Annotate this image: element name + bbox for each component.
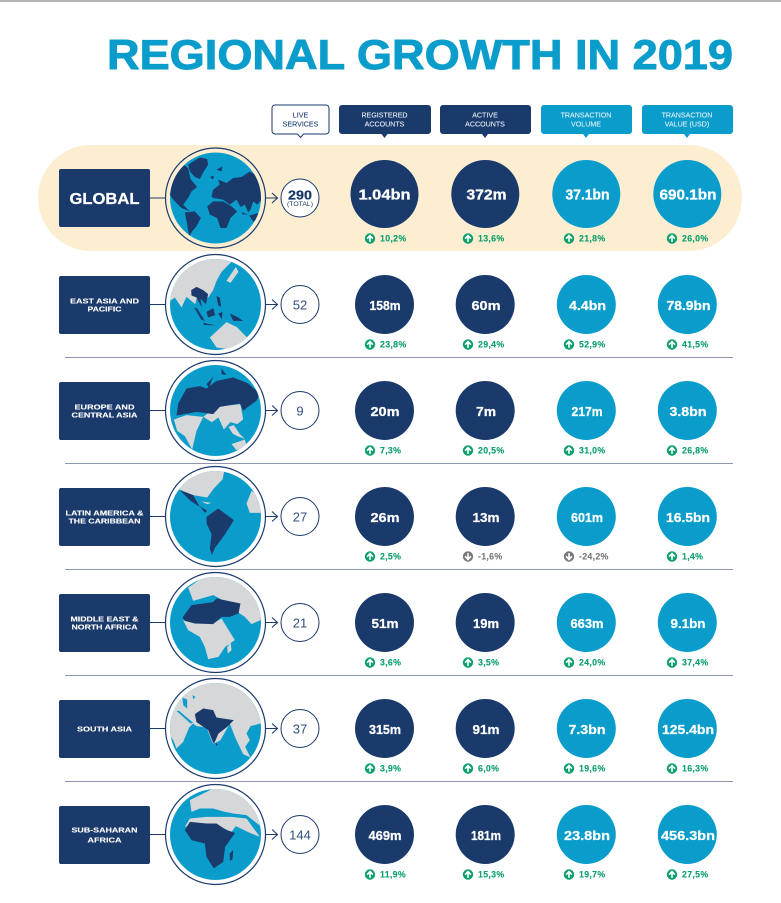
metrics: europe and central asia: 3.8bn	[670, 404, 707, 419]
metrics: europe and central asia: 26,8%	[682, 446, 708, 456]
metrics: latin america: 26m	[370, 510, 400, 525]
metric: transaction volume	[552, 160, 620, 244]
metric: transaction volume: 37.1bn	[566, 186, 610, 204]
header: registered accounts: ACCOUNTS	[365, 120, 405, 128]
live services: 52: 52	[293, 298, 307, 312]
metrics: south asia: 3,9%	[380, 764, 401, 774]
row: middle east and north africa	[59, 572, 717, 672]
row: global	[59, 148, 721, 248]
metric: active accounts	[451, 160, 519, 244]
metrics: south asia: 19,6%	[579, 764, 605, 774]
metrics: sub-saharan africa: 456.3bn	[661, 828, 715, 843]
metrics: south asia: 6,0%	[478, 764, 499, 774]
label: sub-saharan africa: AFRICA	[88, 836, 122, 844]
label: sub-saharan africa	[59, 806, 150, 864]
metric: transaction volume: 21,8%	[579, 234, 605, 244]
label: europe and central asia: EUROPE AND	[74, 402, 135, 412]
metrics: east asia: 158m	[370, 298, 400, 313]
metrics: sub-saharan africa: 19,7%	[579, 870, 605, 880]
metrics: latin america: 16.5bn	[666, 510, 710, 525]
label: europe and central asia	[59, 382, 150, 440]
label: middle east and north africa: MIDDLE EAST &	[70, 614, 139, 624]
metrics: middle east and north africa: 9.1bn	[670, 616, 706, 631]
metrics: east asia: 4.4bn	[569, 298, 606, 313]
metrics: south asia: 7.3bn	[568, 722, 606, 737]
global highlight band	[38, 145, 742, 251]
row: east asia and pacific	[59, 254, 717, 354]
metrics: europe and central asia: 7m	[476, 404, 496, 419]
header: transaction volume	[541, 105, 632, 138]
live services: 27	[281, 498, 319, 536]
label: middle east and north africa: NORTH AFRICA	[72, 622, 138, 632]
metrics: south asia: 16,3%	[682, 764, 708, 774]
column headers	[272, 105, 733, 138]
globe: europe and central asia	[166, 360, 266, 460]
label: middle east and north africa	[59, 594, 150, 652]
metrics: east asia: 60m	[472, 298, 500, 313]
metrics: sub-saharan africa: 469m	[368, 828, 402, 843]
header: transaction volume: VOLUME	[571, 120, 601, 128]
live services: 37	[281, 710, 319, 748]
metrics: south asia: 315m	[369, 722, 401, 737]
metric: transaction value	[653, 160, 721, 244]
globe: world	[166, 148, 266, 248]
header: active accounts: ACCOUNTS	[465, 120, 505, 128]
live services: 290: 290	[288, 188, 312, 202]
live services: 144: 144	[289, 828, 311, 842]
metrics: latin america: 1,4%	[682, 552, 703, 562]
metrics: latin america: -24,2%	[579, 552, 609, 562]
live services: 9: 9	[296, 404, 304, 418]
label: latin america and the caribbean: THE CARIBBEAN	[68, 516, 140, 526]
dividers	[65, 358, 733, 782]
metrics: east asia: 29,4%	[478, 340, 504, 350]
header: active accounts	[440, 105, 531, 138]
metrics: europe and central asia: 7,3%	[380, 446, 401, 456]
live services: 21	[281, 604, 319, 642]
metrics: sub-saharan africa: 11,9%	[380, 870, 406, 880]
header: live services: SERVICES	[283, 120, 319, 128]
row: latin america and the caribbean	[59, 466, 717, 566]
metrics: middle east and north africa: 37,4%	[682, 658, 708, 668]
metrics: middle east and north africa: 3,6%	[380, 658, 401, 668]
metrics: middle east and north africa: 663m	[570, 616, 604, 631]
metric: transaction value: 26,0%	[682, 234, 708, 244]
header: live services: LIVE	[293, 112, 308, 120]
row: europe and central asia	[59, 360, 717, 460]
metrics: middle east and north africa: 51m	[372, 616, 398, 631]
metrics: sub-saharan africa: 23.8bn	[564, 828, 610, 843]
live services: 52	[281, 286, 319, 324]
metrics: east asia: 23,8%	[380, 340, 406, 350]
label: latin america and the caribbean: LATIN AMERICA &	[66, 508, 144, 518]
metrics: south asia: 125.4bn	[662, 722, 714, 737]
metrics: middle east and north africa: 24,0%	[579, 658, 605, 668]
metric: registered accounts	[350, 160, 418, 244]
label: east asia and pacific	[59, 276, 150, 334]
row: south asia	[59, 678, 717, 778]
header: transaction volume: TRANSACTION	[561, 112, 611, 120]
metrics: europe and central asia	[355, 381, 717, 456]
globe: east asia	[166, 254, 266, 354]
metrics: south asia	[355, 699, 717, 774]
globe: south asia	[165, 678, 266, 778]
live services: 290	[281, 179, 319, 217]
live services: 27: 27	[293, 510, 307, 524]
label: sub-saharan africa: SUB-SAHARAN	[72, 826, 138, 834]
metric: active accounts: 13,6%	[478, 234, 504, 244]
globe: latin america	[166, 466, 266, 566]
metrics: middle east and north africa	[355, 593, 717, 668]
live services: 144	[281, 816, 319, 854]
header: registered accounts	[339, 105, 431, 138]
metrics: south asia: 91m	[472, 722, 500, 737]
label: global	[59, 169, 150, 227]
header: active accounts: ACTIVE	[472, 112, 498, 120]
metrics: europe and central asia: 20m	[370, 404, 400, 419]
metrics: latin america: 601m	[571, 510, 603, 525]
globe: sub-saharan africa	[166, 784, 266, 884]
label: east asia and pacific: PACIFIC	[88, 304, 122, 314]
metrics: latin america: 13m	[472, 510, 500, 525]
metrics: europe and central asia: 217m	[572, 404, 602, 419]
metrics: sub-saharan africa	[355, 805, 717, 880]
live services: 21: 21	[293, 616, 307, 630]
globe: middle east and north africa	[166, 572, 266, 672]
metrics: east asia: 41,5%	[682, 340, 708, 350]
metrics: east asia: 52,9%	[579, 340, 605, 350]
metric: registered accounts: 1.04bn	[358, 186, 410, 204]
metrics: latin america: 2,5%	[380, 552, 401, 562]
label: europe and central asia: CENTRAL ASIA	[72, 410, 138, 420]
metric: active accounts: 372m	[466, 186, 506, 204]
metric: transaction value: 690.1bn	[660, 186, 716, 204]
label: global: GLOBAL	[70, 191, 140, 208]
metric: registered accounts: 10,2%	[380, 234, 406, 244]
metrics: east asia: 78.9bn	[666, 298, 711, 313]
header: live services	[272, 105, 329, 138]
metrics: sub-saharan africa: 181m	[471, 828, 501, 843]
metrics: sub-saharan africa: 27,5%	[682, 870, 708, 880]
metrics: sub-saharan africa: 15,3%	[478, 870, 504, 880]
metrics: latin america: -1,6%	[478, 552, 502, 562]
header: transaction value: VALUE (USD)	[665, 120, 709, 128]
live services: 37: 37	[293, 722, 307, 736]
header: transaction value	[642, 105, 733, 138]
label: east asia and pacific: EAST ASIA AND	[70, 296, 140, 306]
live services: 290: (TOTAL)	[287, 201, 313, 208]
header: registered accounts: REGISTERED	[361, 112, 408, 120]
label: latin america and the caribbean	[59, 488, 150, 546]
metrics: east asia	[355, 275, 717, 350]
live services: 9	[281, 392, 319, 430]
metrics: middle east and north africa: 19m	[473, 616, 499, 631]
metrics: middle east and north africa: 3,5%	[478, 658, 499, 668]
title: REGIONAL GROWTH IN 2019	[107, 31, 733, 78]
metrics: europe and central asia: 31,0%	[579, 446, 605, 456]
header: transaction value: TRANSACTION	[662, 112, 712, 120]
label: south asia	[59, 700, 150, 758]
metrics: latin america	[355, 487, 717, 562]
metrics: europe and central asia: 20,5%	[478, 446, 504, 456]
row: sub-saharan africa	[59, 784, 717, 884]
label: south asia: SOUTH ASIA	[77, 724, 133, 734]
